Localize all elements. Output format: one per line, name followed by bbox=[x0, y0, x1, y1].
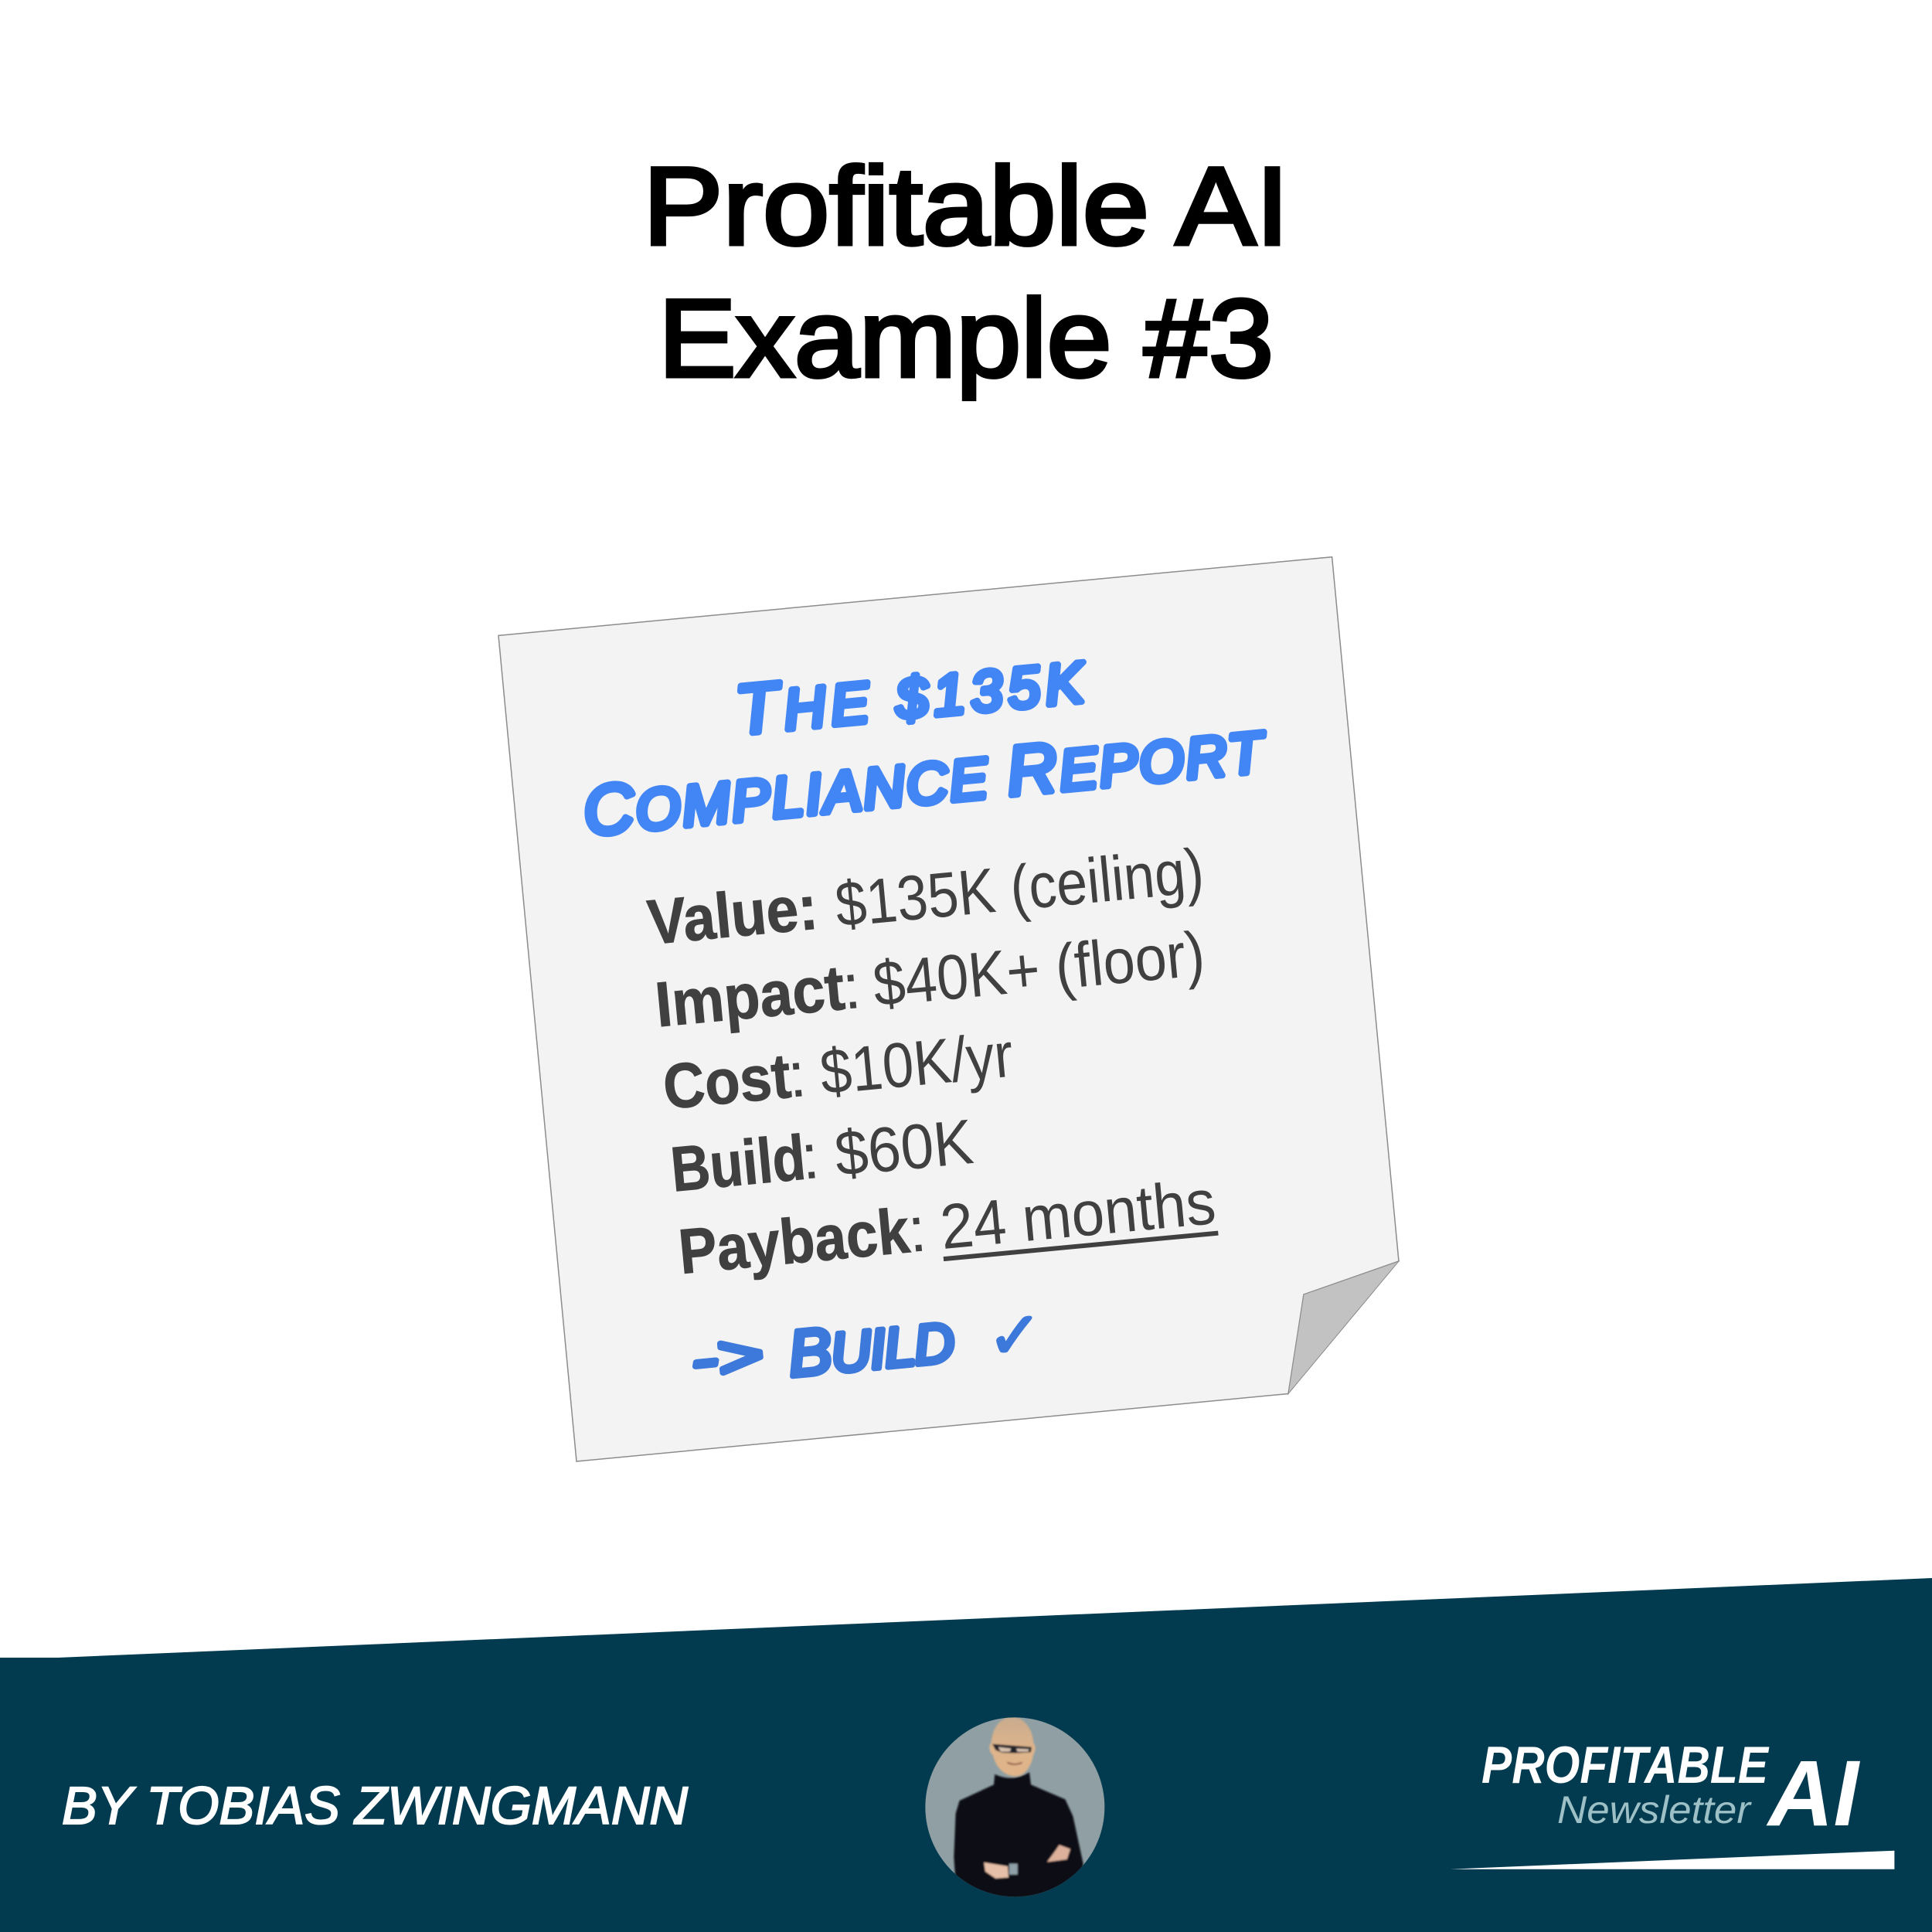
note metrics list: Payback bbox=[675, 1196, 913, 1287]
note heading: COMPLIANCE REPORT bbox=[580, 709, 1270, 851]
note metrics list: $10K/yr bbox=[817, 1020, 1016, 1108]
panel: sticky note bbox=[498, 557, 1399, 1461]
note metrics list: $60K bbox=[832, 1107, 976, 1189]
note metrics list bbox=[645, 836, 1238, 1287]
title: Example #3 bbox=[658, 277, 1274, 400]
note folded corner bbox=[1288, 1261, 1399, 1394]
note verdict bbox=[689, 1298, 1042, 1393]
note metrics list: 24 months bbox=[937, 1167, 1219, 1263]
note heading: THE $135K bbox=[732, 640, 1090, 750]
logo: Profitable AI Newsletter: AI bbox=[1766, 1740, 1860, 1845]
note metrics list: $40K+ (floor) bbox=[870, 919, 1208, 1020]
portrait bbox=[922, 1713, 1107, 1901]
note metrics list: : bbox=[839, 951, 863, 1023]
logo: Profitable AI Newsletter bbox=[1451, 1736, 1894, 1869]
note metrics list: : bbox=[798, 1121, 822, 1193]
note paper bbox=[498, 557, 1399, 1461]
footer band bbox=[0, 1578, 1932, 1932]
note metrics list: : bbox=[905, 1194, 929, 1266]
title bbox=[643, 145, 1289, 400]
byline: BY TOBIAS ZWINGMANN bbox=[62, 1776, 688, 1835]
title: Profitable AI bbox=[643, 145, 1289, 268]
logo: Profitable AI Newsletter: Newsletter bbox=[1557, 1788, 1752, 1832]
note metrics list: : bbox=[785, 1039, 809, 1111]
note verdict: BUILD bbox=[785, 1302, 957, 1390]
note metrics list: Value: bbox=[645, 872, 821, 958]
note metrics list: $135K (ceiling) bbox=[832, 836, 1206, 940]
note heading bbox=[580, 640, 1270, 851]
logo: Profitable AI Newsletter: PROFITABLE bbox=[1481, 1736, 1770, 1794]
note metrics list: Impact bbox=[652, 953, 848, 1040]
note metrics list: Build bbox=[668, 1123, 808, 1206]
note verdict: ✓ bbox=[988, 1298, 1042, 1373]
note verdict: -> bbox=[689, 1321, 765, 1393]
note metrics list: Cost bbox=[660, 1041, 794, 1123]
